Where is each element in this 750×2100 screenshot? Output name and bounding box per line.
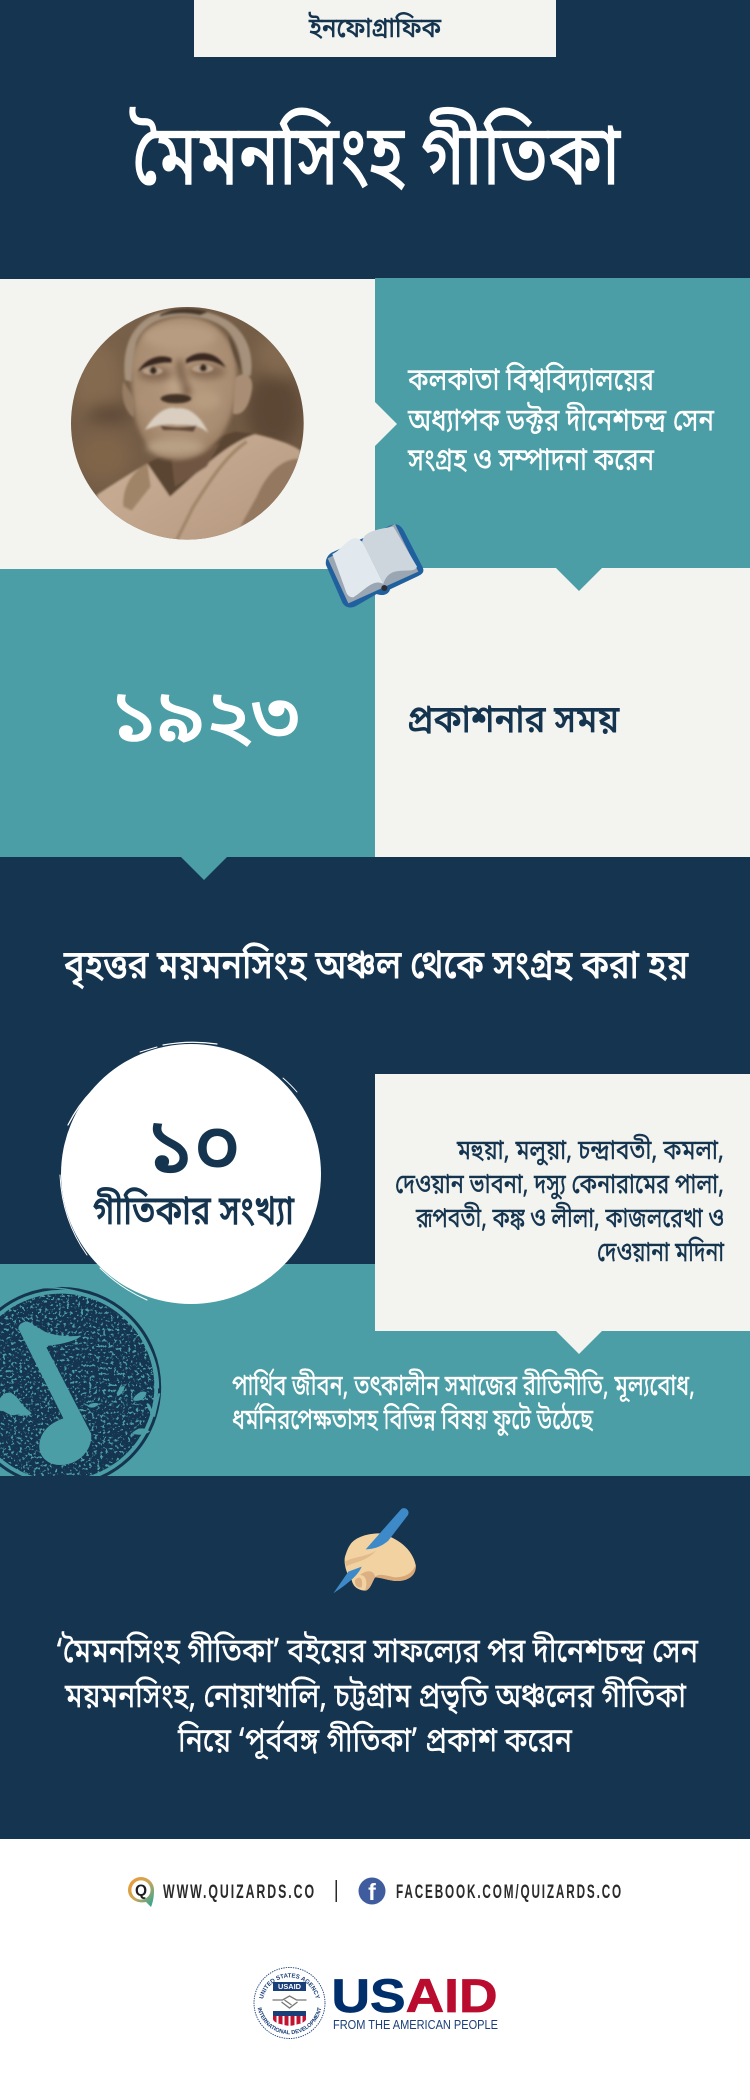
icon: grunge music note (0, 1287, 160, 1486)
icon: writing hand (333, 1508, 416, 1593)
label tab (194, 0, 556, 57)
icon: quizards logo: Q (135, 1882, 147, 1900)
white brush circle with count (60, 1042, 321, 1304)
panel: teal lower band (0, 1264, 750, 1476)
link: website: WWW.QUIZARDS.CO (163, 1882, 316, 1903)
label tab: ইনফোগ্রাফিক (308, 12, 442, 49)
panel: publication label: প্রকাশনার সময় (407, 697, 620, 748)
text: closing statement: নিয়ে ‘পূর্ববঙ্গ গীতিকা’ প্রকাশ করেন (177, 1720, 572, 1766)
panel: publication label (375, 568, 750, 857)
panel: portrait (0, 279, 375, 569)
panel: ballad names (375, 1074, 750, 1354)
panel: publication year (0, 569, 375, 857)
logo: usaid wordmark: USAID (332, 1969, 498, 2022)
panel: closing navy band (0, 1476, 750, 1839)
title: মৈমনসিংহ গীতিকা (130, 108, 621, 219)
pointer: year panel (181, 857, 227, 880)
panel: editor text: কলকাতা বিশ্ববিদ্যালয়ের (407, 362, 654, 403)
panel: publication year: ১৯২৩ (110, 674, 299, 771)
number: ten: ১০ (146, 1103, 241, 1204)
caption: number of ballads: গীতিকার সংখ্যা (93, 1187, 295, 1241)
footer: white background (0, 1839, 750, 2100)
logo: usaid seal (254, 1967, 326, 2039)
icon: quizards logo (128, 1877, 154, 1907)
text: closing statement (56, 1631, 698, 1766)
portrait of Dinesh Chandra Sen (71, 307, 304, 540)
icon: open book (326, 524, 423, 608)
logo: usaid seal: INTERNATIONAL DEVELOPMENT (258, 2007, 322, 2034)
icon: facebook: f (368, 1879, 376, 1905)
text: themes: ধর্মনিরপেক্ষতাসহ বিভিন্ন বিষয় ফুটে উঠেছে (232, 1402, 593, 1441)
logo: usaid seal: UNITED STATES AGENCY (259, 1973, 320, 1998)
heading: greater Mymensingh: বৃহত্তর ময়মনসিংহ অঞ্চল থেকে সংগ্রহ করা হয় (63, 942, 689, 994)
text: themes (232, 1368, 695, 1441)
panel: editor text: সংগ্রহ ও সম্পাদনা করেন (407, 442, 654, 483)
logo: usaid wordmark: FROM THE AMERICAN PEOPLE (333, 2018, 498, 2032)
logo: usaid seal: USAID (278, 1982, 302, 1991)
background: navy region (0, 857, 750, 1264)
panel: editor text (375, 278, 750, 568)
divider (336, 1880, 337, 1902)
background: top navy band (0, 0, 750, 279)
icon: facebook (358, 1878, 386, 1905)
